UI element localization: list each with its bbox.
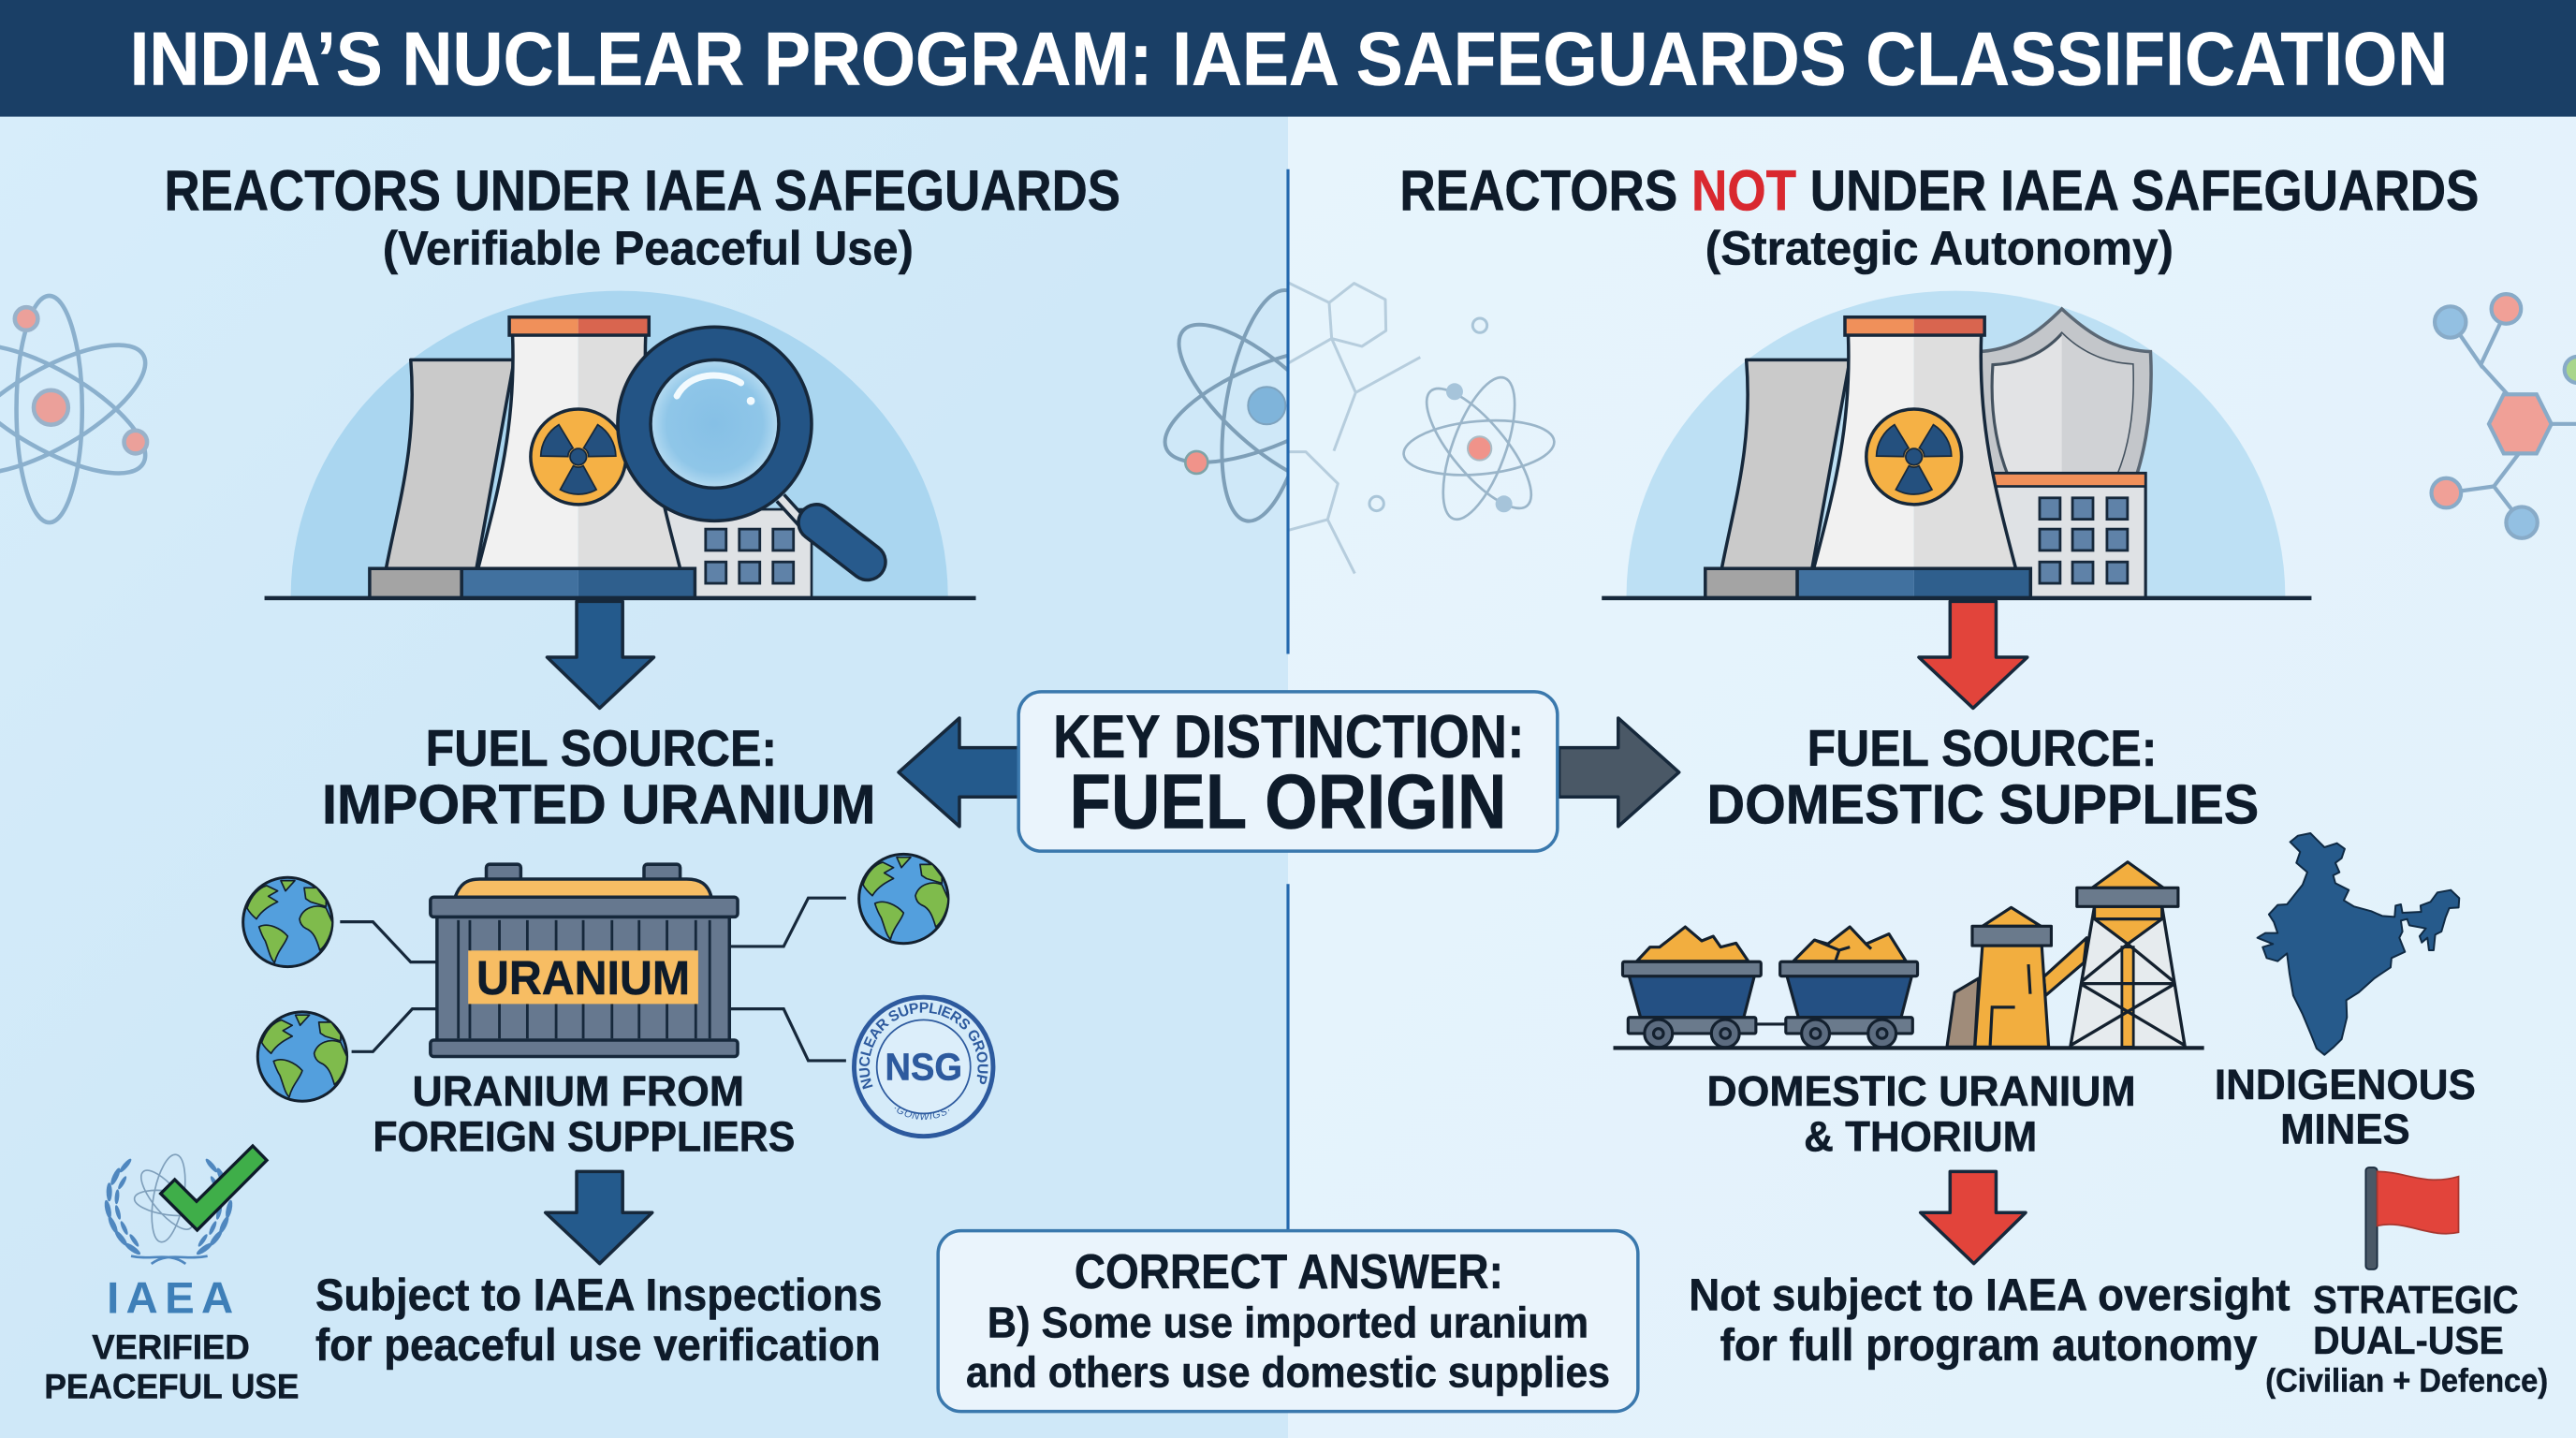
arrow: key distinction to left xyxy=(899,718,1018,827)
illustration: reactor with shield xyxy=(1602,291,2311,598)
icon: uranium container xyxy=(431,864,738,1057)
text: subject to inspections: for peaceful use verification xyxy=(315,1320,881,1371)
heading: left column: REACTORS UNDER IAEA SAFEGUARDS xyxy=(165,159,1120,224)
text: subject to inspections xyxy=(315,1270,882,1371)
heading: imported fuel source: IMPORTED URANIUM xyxy=(322,772,875,835)
callout: correct answer xyxy=(938,1231,1638,1412)
arrow: foreign suppliers down to inspections xyxy=(546,1171,652,1264)
icon: mine carts and headframes xyxy=(1614,862,2204,1048)
label: domestic uranium and thorium: & THORIUM xyxy=(1804,1112,2037,1160)
icon: red flag xyxy=(2365,1167,2459,1269)
icon: globe one xyxy=(243,877,332,967)
label: strategic dual-use: DUAL-USE xyxy=(2313,1318,2504,1362)
background: left panel xyxy=(0,117,1288,1438)
decorative atom: centre left xyxy=(1163,288,1286,523)
divider: centre lower xyxy=(1287,884,1289,1231)
text: subject to inspections: Subject to IAEA Inspections xyxy=(315,1270,882,1321)
decorative molecule: far right xyxy=(2432,294,2576,538)
icon: NSG seal: NSG xyxy=(885,1045,962,1088)
decorative molecule: centre right xyxy=(1288,283,1487,574)
callout: key distinction: KEY DISTINCTION: xyxy=(1053,702,1525,770)
connectors: suppliers to container xyxy=(340,898,846,1061)
arrow: domestic down to no oversight xyxy=(1921,1171,2026,1264)
icon: IAEA emblem with check xyxy=(103,1146,267,1264)
title: INDIA’S NUCLEAR PROGRAM: IAEA SAFEGUARDS CLASSIFICATION xyxy=(130,17,2448,101)
heading: domestic fuel source: FUEL SOURCE: xyxy=(1808,720,2157,777)
icon: globe three xyxy=(859,854,948,944)
heading: right column xyxy=(1399,159,2479,275)
heading: imported fuel source: FUEL SOURCE: xyxy=(426,720,777,777)
heading: domestic fuel source: DOMESTIC SUPPLIES xyxy=(1707,772,2259,835)
callout: correct answer: CORRECT ANSWER: xyxy=(1075,1244,1503,1299)
headframe tower xyxy=(2071,862,2185,1047)
label: uranium from foreign suppliers: FOREIGN SUPPLIERS xyxy=(373,1112,795,1160)
heading: imported fuel source xyxy=(322,720,875,835)
label: verified peaceful use: IAEA xyxy=(107,1273,233,1323)
arrow: key distinction to right xyxy=(1559,718,1679,827)
label: strategic dual-use: (Civilian + Defence) xyxy=(2265,1363,2548,1400)
label: indigenous mines: MINES xyxy=(2280,1106,2410,1153)
icon: NSG seal: ·GONWIGS· xyxy=(895,1108,949,1120)
callout: key distinction xyxy=(1018,692,1558,851)
callout: correct answer: and others use domestic supplies xyxy=(966,1347,1610,1396)
heading: left column: (Verifiable Peaceful Use) xyxy=(383,222,914,275)
heading: right column: (Strategic Autonomy) xyxy=(1705,222,2174,275)
title banner xyxy=(0,0,2576,117)
callout: correct answer: B) Some use imported uranium xyxy=(988,1299,1588,1347)
label: domestic uranium and thorium xyxy=(1707,1067,2136,1160)
text: not subject to oversight: for full program autonomy xyxy=(1720,1320,2258,1371)
silo xyxy=(1947,907,2086,1047)
label: verified peaceful use: PEACEFUL USE xyxy=(44,1368,299,1406)
background: right panel xyxy=(1288,117,2576,1438)
decorative atom: far left xyxy=(0,296,163,522)
text: not subject to oversight: Not subject to IAEA oversight xyxy=(1689,1270,2291,1321)
label: indigenous mines: INDIGENOUS xyxy=(2215,1061,2476,1108)
label: domestic uranium and thorium: DOMESTIC URANIUM xyxy=(1707,1067,2136,1115)
icon: magnifying glass xyxy=(618,327,868,562)
icon: shield xyxy=(1976,309,2151,509)
text: not subject to oversight xyxy=(1689,1270,2291,1371)
label: indigenous mines xyxy=(2215,1061,2476,1153)
label: uranium from foreign suppliers: URANIUM FROM xyxy=(413,1067,744,1115)
illustration: reactor with magnifying glass xyxy=(265,291,976,598)
heading: left column xyxy=(165,159,1120,275)
icon: NSG seal xyxy=(852,994,996,1138)
label: verified peaceful use xyxy=(44,1273,299,1406)
label: verified peaceful use: VERIFIED xyxy=(92,1328,250,1366)
decorative atom: centre right xyxy=(1401,369,1557,528)
icon: NSG seal: NUCLEAR SUPPLIERS GROUP xyxy=(859,1002,988,1090)
label: strategic dual-use xyxy=(2265,1277,2548,1400)
ore cart one xyxy=(1623,927,1761,1048)
icon: globe two xyxy=(257,1012,347,1101)
label: strategic dual-use: STRATEGIC xyxy=(2313,1277,2519,1321)
label: uranium from foreign suppliers xyxy=(373,1067,795,1160)
ore cart two xyxy=(1780,927,1918,1048)
divider: centre upper xyxy=(1287,169,1289,654)
heading: right column: REACTORS NOT UNDER IAEA SAFEGUARDS xyxy=(1399,159,2479,224)
label: uranium: URANIUM xyxy=(476,951,690,1005)
heading: domestic fuel source xyxy=(1707,720,2259,835)
arrow: reactor down to domestic fuel xyxy=(1919,601,2027,708)
arrow: reactor down to imported fuel xyxy=(547,601,654,708)
callout: key distinction: FUEL ORIGIN xyxy=(1070,759,1506,845)
icon: map of India xyxy=(2258,833,2459,1055)
icon: radiation trefoil xyxy=(531,409,626,505)
